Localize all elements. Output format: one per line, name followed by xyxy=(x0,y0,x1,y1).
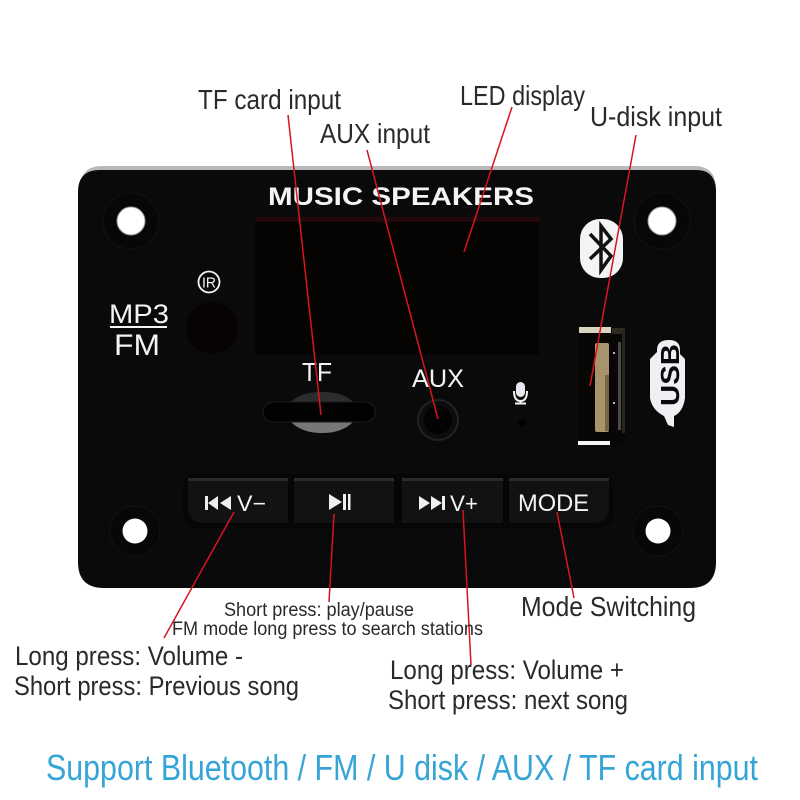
arrow: LED display xyxy=(464,107,512,252)
LED display window xyxy=(255,217,539,355)
label: AUX input: AUX input xyxy=(320,118,430,149)
text: volume up description: Long press: Volume + xyxy=(390,655,624,685)
AUX jack xyxy=(418,400,458,440)
label: MP3 / FM: FM xyxy=(114,329,160,362)
icon: bottom-right screw hole xyxy=(633,506,683,556)
button: MODE: MODE xyxy=(518,490,589,517)
arrow: mode xyxy=(557,512,574,598)
label: LED display: LED display xyxy=(460,80,585,111)
brand text: MUSIC SPEAKERS: MUSIC SPEAKERS xyxy=(268,183,534,211)
text: volume up description: Short press: next song xyxy=(388,685,628,715)
TF card slot xyxy=(263,392,375,433)
label: U-disk input: U-disk input xyxy=(590,101,722,132)
button: previous / V- xyxy=(188,478,288,523)
label: Mode Switching: Mode Switching xyxy=(521,591,696,622)
icon: top-left screw hole xyxy=(103,193,159,249)
text: play/pause description xyxy=(172,600,483,640)
arrow: volume down xyxy=(164,512,234,638)
arrow: TF card input xyxy=(288,115,321,415)
text: volume down description xyxy=(14,641,299,701)
button: play/pause xyxy=(294,478,394,523)
text: play/pause description: FM mode long press to search stations xyxy=(172,619,483,640)
label: MP3 / FM xyxy=(109,299,169,362)
button group xyxy=(183,474,613,528)
icon: USB plug label: USB xyxy=(655,344,685,406)
button: next / V+ xyxy=(402,478,503,523)
arrow: volume up xyxy=(463,510,471,665)
label: TF: TF xyxy=(302,357,332,387)
button: previous / V-: V− xyxy=(237,491,266,516)
label: TF card input: TF card input xyxy=(198,84,341,115)
icon: microphone xyxy=(514,382,527,427)
IR receiver window xyxy=(186,302,238,354)
arrow: U-disk input xyxy=(590,135,636,386)
icon: Bluetooth badge xyxy=(580,219,623,278)
icon: USB plug label xyxy=(650,340,685,427)
panel: MP3 player module faceplate xyxy=(78,166,716,588)
arrow: play/pause xyxy=(329,514,334,602)
button: next / V+: V+ xyxy=(450,491,478,516)
callout lines xyxy=(164,107,636,665)
text: volume down description: Short press: Previous song xyxy=(14,671,299,701)
button: MODE xyxy=(509,478,609,523)
USB port xyxy=(578,327,625,445)
icon: IR mark: IR xyxy=(202,274,216,292)
label: AUX: AUX xyxy=(412,365,464,393)
icon: IR mark xyxy=(198,272,220,292)
text: play/pause description: Short press: play/pause xyxy=(224,600,414,621)
text: volume up description xyxy=(388,655,628,715)
arrow: AUX input xyxy=(367,150,438,419)
icon: bottom-left screw hole xyxy=(110,506,160,556)
icon: top-right screw hole xyxy=(634,193,690,249)
text: volume down description: Long press: Volume - xyxy=(15,641,243,671)
label: MP3 / FM: MP3 xyxy=(109,299,169,329)
